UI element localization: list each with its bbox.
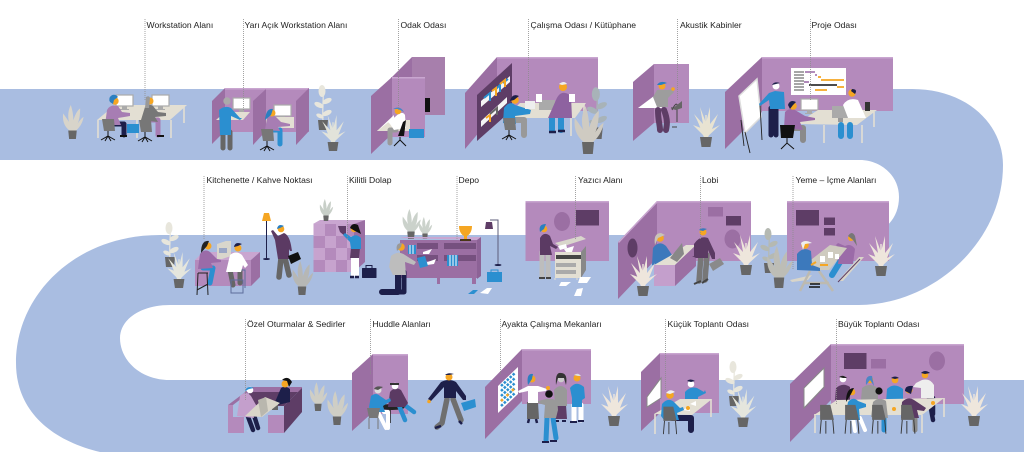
project room side wall <box>725 57 762 149</box>
person on phone and stool <box>653 82 682 130</box>
person at workstation right <box>138 96 166 142</box>
label: Yarı Açık Workstation Alanı: Yarı Açık Workstation Alanı <box>244 20 347 30</box>
coffee machine <box>217 241 231 259</box>
dining man <box>797 241 820 287</box>
copier <box>555 236 586 280</box>
label: Lobi: Lobi <box>702 175 718 185</box>
sofa front blocks <box>228 405 284 433</box>
small meeting table <box>654 399 712 434</box>
label: Workstation Alanı <box>145 19 213 100</box>
label: Kitchenette / Kahve Noktası: Kitchenette / Kahve Noktası <box>206 175 313 185</box>
front row woman blue <box>846 388 866 431</box>
scene: Ayakta Çalışma Mekanları <box>485 319 628 442</box>
study table <box>510 100 586 136</box>
small meeting wall <box>641 353 719 431</box>
person in purple seated <box>780 101 815 149</box>
label: Ayakta Çalışma Mekanları: Ayakta Çalışma Mekanları <box>502 319 602 329</box>
standing person in blue <box>219 97 242 148</box>
picnic table <box>790 245 864 291</box>
label: Büyük Toplantı Odası: Büyük Toplantı Odası <box>838 319 920 329</box>
study room back wall <box>497 57 598 111</box>
blue box and floor books <box>468 270 502 294</box>
seated person reading <box>502 95 535 140</box>
front row man grey <box>871 387 888 430</box>
scene: Workstation Alanı <box>63 19 213 142</box>
printer room wall <box>526 201 609 261</box>
large meeting table <box>814 398 944 433</box>
plants: spiky pair <box>310 382 348 425</box>
lamp dark <box>485 220 502 266</box>
kneeling man <box>382 243 428 292</box>
kitchen counter <box>195 252 260 286</box>
label: Çalışma Odası / Kütüphane <box>528 19 636 100</box>
label: Kilitli Dolap: Kilitli Dolap <box>349 175 392 185</box>
scene: Huddle Alanları <box>352 319 476 431</box>
seated man blue <box>367 386 391 429</box>
person in white seated <box>841 89 870 136</box>
label: Büyük Toplantı Odası <box>836 319 920 405</box>
seated person at cubicle <box>260 109 290 151</box>
scene: Küçük Toplantı Odası <box>641 319 756 434</box>
man on stool <box>226 243 248 293</box>
scene: Özel Oturmalar & Sedirler <box>228 319 346 433</box>
man with portfolio <box>692 228 724 284</box>
label: Lobi <box>700 175 718 240</box>
plant: spiky <box>292 261 313 295</box>
shelf books <box>408 245 458 266</box>
loose papers <box>559 277 591 296</box>
cubicle right panel <box>296 88 309 145</box>
label: Akustik Kabinler: Akustik Kabinler <box>680 20 742 30</box>
plant on locker <box>320 199 333 221</box>
huddle wall <box>352 354 408 431</box>
plants in study room <box>575 87 608 154</box>
scene: Yeme – İçme Alanları <box>787 175 895 291</box>
person at back of table <box>685 380 706 401</box>
woman grey <box>554 373 567 421</box>
scene: Odak Odası <box>371 19 446 154</box>
sticky-note wall board <box>498 367 518 413</box>
label: Özel Oturmalar & Sedirler: Özel Oturmalar & Sedirler <box>247 319 346 329</box>
plants left of kitchenette <box>160 222 192 288</box>
plant: feathery by acoustic cabin <box>693 107 720 147</box>
label: Depo: Depo <box>458 175 479 185</box>
acoustic cabin <box>633 64 689 141</box>
flip chart <box>739 79 762 153</box>
plants in lobby <box>630 235 760 296</box>
cubicle desks <box>216 98 294 128</box>
plant: feathery <box>961 386 988 426</box>
person front seated <box>661 390 691 434</box>
woman on sofa <box>237 387 259 430</box>
storage shelf <box>400 237 481 284</box>
bookshelf <box>477 63 512 141</box>
front row man purple <box>901 386 926 430</box>
man blue shirt <box>570 374 585 422</box>
plant right <box>868 236 895 276</box>
scene: Yazıcı Alanı <box>526 175 623 296</box>
trophy <box>459 226 472 241</box>
standing room back wall <box>522 349 591 404</box>
scene: Akustik Kabinler <box>633 19 742 141</box>
reception desk <box>654 243 696 286</box>
man with briefcase <box>271 225 301 277</box>
project room back wall <box>762 57 893 111</box>
label: Workstation Alanı: Workstation Alanı <box>146 20 213 30</box>
scene: Yarı Açık Workstation Alanı <box>212 19 347 151</box>
scene: Depo <box>382 175 502 294</box>
label: Proje Odası <box>810 19 857 100</box>
rear focus pod <box>392 57 445 115</box>
label: Proje Odası: Proje Odası <box>812 20 857 30</box>
standing room side wall <box>485 349 522 439</box>
workstation desk and monitors <box>97 95 187 138</box>
plants <box>724 361 756 427</box>
label: Küçük Toplantı Odası: Küçük Toplantı Odası <box>668 319 749 329</box>
sofa back <box>228 387 302 433</box>
sofa table <box>245 397 280 417</box>
scene: Kitchenette / Kahve Noktası <box>160 175 313 295</box>
label: Yazıcı Alanı: Yazıcı Alanı <box>578 175 623 185</box>
cubicle back wall <box>225 88 309 132</box>
woman at locker <box>338 224 361 277</box>
man on sofa <box>271 378 292 410</box>
label: Yeme – İçme Alanları: Yeme – İçme Alanları <box>796 175 876 185</box>
cups and food <box>811 252 839 266</box>
person with white hair <box>536 82 575 132</box>
large meeting side wall <box>790 344 831 442</box>
project table and monitors <box>796 99 877 143</box>
label: Kitchenette / Kahve Noktası <box>204 175 313 240</box>
locker cabinet <box>313 220 365 272</box>
scene: Çalışma Odası / Kütüphane <box>465 19 636 154</box>
presenter woman <box>518 374 550 423</box>
person at workstation left <box>101 95 130 141</box>
navy briefcase <box>362 266 376 278</box>
plant: spiky <box>63 105 84 139</box>
scene: Büyük Toplantı Odası <box>790 319 988 442</box>
large meeting back wall <box>831 344 964 404</box>
dining wall <box>787 201 889 261</box>
front focus pod <box>371 77 425 154</box>
gantt chart <box>791 68 846 95</box>
huddle table <box>379 404 405 423</box>
man from back <box>538 390 558 442</box>
lobby back wall <box>657 201 751 261</box>
focus desk and person <box>377 98 430 146</box>
label: Odak Odası: Odak Odası <box>400 20 446 30</box>
back row people <box>835 371 934 420</box>
standing presenter <box>759 82 785 135</box>
scene: Lobi <box>618 175 760 299</box>
cubicle middle panel <box>253 89 266 145</box>
chairs <box>820 405 915 434</box>
receptionist <box>652 233 677 268</box>
plant: feathery <box>601 386 628 426</box>
cubicle left side panel <box>212 88 225 144</box>
dining woman <box>832 233 857 275</box>
floor lamp orange <box>262 213 271 260</box>
scene: Kilitli Dolap <box>313 175 392 278</box>
woman on stool <box>197 241 221 295</box>
plants between lobby and dining <box>759 228 793 288</box>
man at copier <box>539 224 558 278</box>
label: Ayakta Çalışma Mekanları <box>500 319 602 375</box>
label: Huddle Alanları: Huddle Alanları <box>372 319 431 329</box>
running man with briefcase <box>427 373 476 428</box>
plants: between cubicle and focus room <box>313 85 346 151</box>
lobby side wall <box>618 201 658 299</box>
scene: Proje Odası <box>725 19 893 153</box>
study room side wall <box>465 57 497 149</box>
plants on shelf <box>403 209 432 239</box>
label: Çalışma Odası / Kütüphane: Çalışma Odası / Kütüphane <box>530 20 636 30</box>
seated woman purple <box>388 383 414 420</box>
